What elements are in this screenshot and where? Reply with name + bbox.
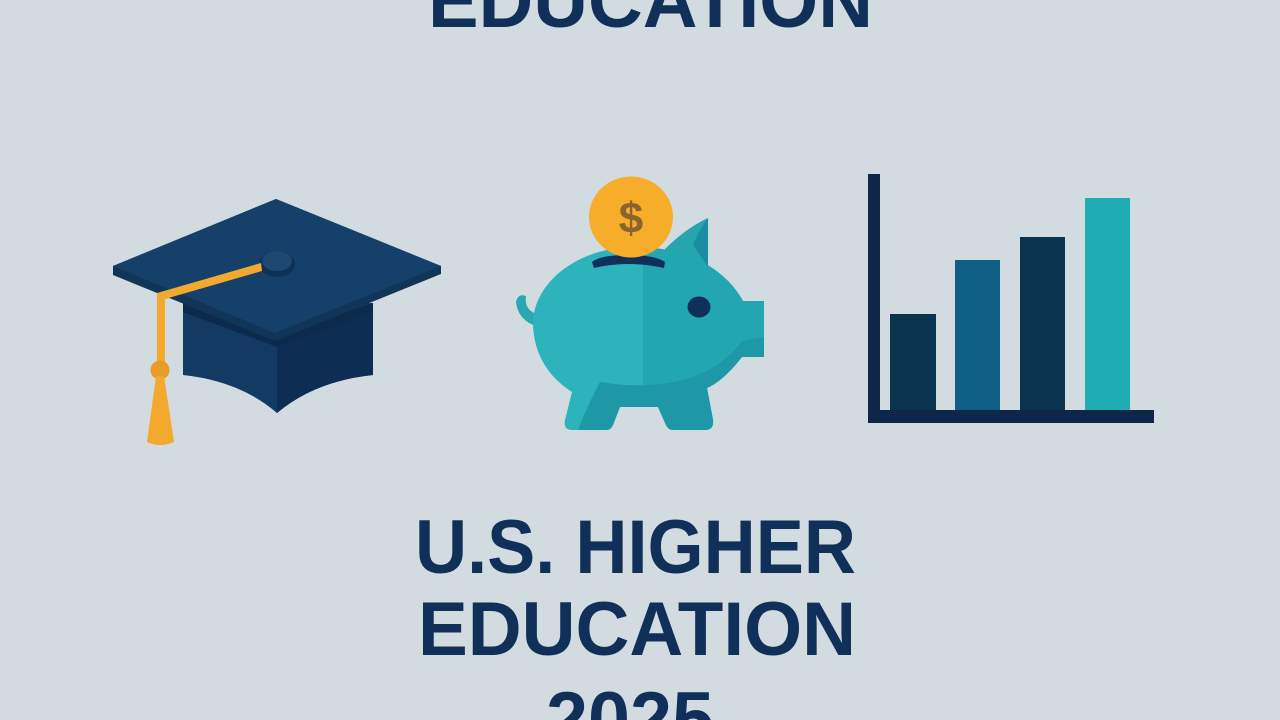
pig eye [688, 296, 710, 318]
heading line 2: EDUCATION [418, 587, 856, 672]
icon: bar chart [868, 174, 1154, 423]
coin: $ [619, 194, 643, 243]
pig tail [516, 295, 536, 326]
mortarboard [113, 199, 441, 341]
pig ear fold [693, 218, 708, 267]
pig body [533, 247, 764, 430]
bar 4 [1085, 198, 1130, 412]
bar 1 [890, 314, 936, 414]
chart axes [868, 174, 1154, 423]
coin [589, 176, 673, 258]
tassel [147, 263, 262, 445]
bar 3 [1020, 237, 1065, 413]
icon: graduation cap [113, 199, 441, 445]
icon: piggy bank with coin [516, 176, 764, 430]
bar 2 [955, 260, 1000, 412]
coin slot [592, 255, 665, 268]
cap base [183, 303, 373, 413]
cap button [259, 251, 295, 277]
pig ear [664, 218, 708, 270]
heading line 1: U.S. HIGHER [415, 505, 856, 590]
pig belly shadow and legs [578, 337, 764, 430]
